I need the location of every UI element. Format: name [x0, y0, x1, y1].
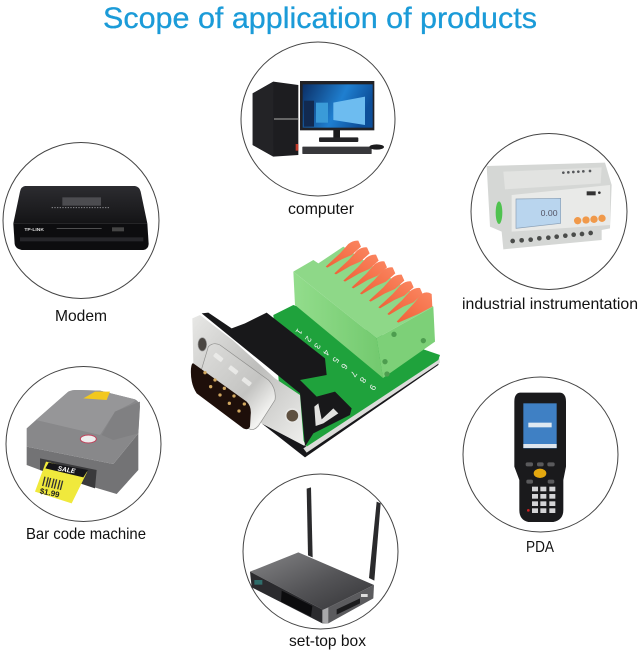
icon: label printer: $1.99 [39, 486, 61, 500]
circle: printer [6, 366, 161, 522]
panel: set-top box [243, 474, 398, 650]
green terminal block with orange buttons [293, 241, 435, 378]
board base: 9 [367, 383, 378, 392]
icon: power meter: 0.00 [541, 208, 558, 218]
board base: 5 [330, 355, 341, 365]
title: Scope of application of products [103, 2, 537, 35]
icon: power meter [487, 163, 612, 249]
icon: modem [13, 186, 149, 250]
black connector shell [202, 313, 352, 447]
d-sub pin face [191, 363, 251, 429]
panel: pda [463, 377, 618, 556]
icon: label printer [27, 390, 140, 503]
circle: pda [463, 377, 618, 532]
small latch [314, 403, 338, 426]
panel: modem [3, 142, 159, 325]
metal flange [192, 315, 304, 446]
label: set-top box: set-top box [289, 633, 366, 650]
board base: 7 [348, 369, 359, 379]
board base [262, 305, 440, 457]
label: computer: computer [288, 201, 355, 218]
board base: 4 [321, 348, 332, 358]
icon: label printer: SALE [57, 465, 76, 475]
panel: computer [241, 42, 395, 218]
label: industrial instrumentation: industrial instrumentation [462, 296, 638, 313]
DB9 connector body [191, 313, 352, 447]
panel: industrial instrumentation [462, 134, 638, 313]
icon: modem: TP-LINK [24, 227, 44, 233]
product: DB9 terminal connector [191, 241, 440, 457]
board base: 3 [312, 341, 323, 351]
board base: 1 [294, 327, 305, 337]
board base: 6 [339, 362, 350, 371]
circle: meter [471, 134, 627, 290]
label: pda: PDA [526, 539, 554, 556]
board base: 2 [303, 334, 314, 344]
circle: modem [3, 142, 159, 298]
icon: desktop computer [253, 81, 384, 157]
label: modem: Modem [55, 308, 107, 325]
d-sub metal shell [198, 344, 275, 430]
icon: handheld pda [514, 393, 566, 522]
icon: set-top box [250, 487, 381, 623]
label: bar code machine: Bar code machine [26, 526, 146, 543]
circle: computer [241, 42, 395, 196]
circle: set-top box [243, 474, 398, 629]
panel: bar code machine [6, 366, 161, 543]
board base: 8 [358, 375, 369, 385]
